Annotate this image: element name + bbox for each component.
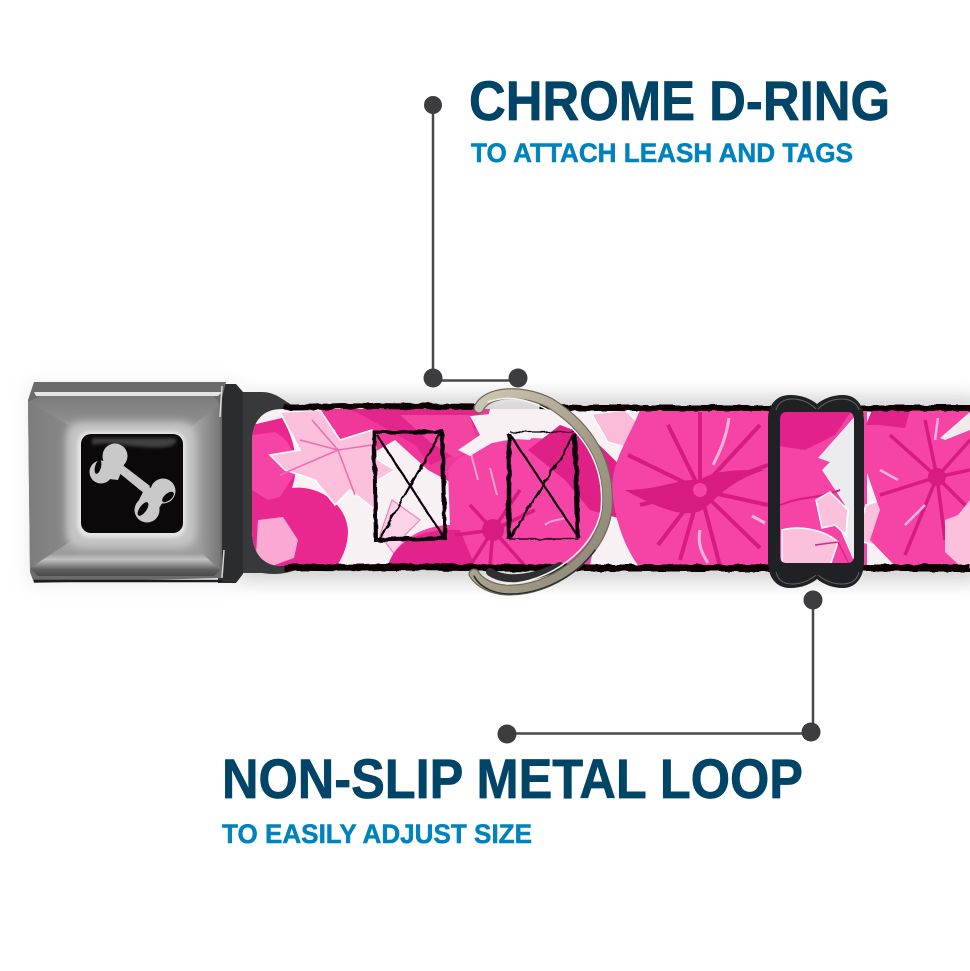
light flower left [270,410,395,512]
left flower pieces [252,418,348,570]
buckle bevel left [28,402,80,568]
callout leader: metal loop [498,590,822,744]
icon: bone [90,444,176,522]
light flower near ring [591,410,636,447]
white pieces at top centre [458,414,532,456]
buckle bevel top [28,396,220,432]
buckle bevel right [183,405,220,570]
right flower [866,410,970,566]
badge gloss [92,438,177,448]
buckle soft glow frame [66,422,196,548]
heading: non-slip metal loop: NON-SLIP METAL LOOP [222,747,803,810]
buckle bottom edge [34,580,222,582]
strap connector behind buckle [238,392,296,574]
centre flower [388,425,625,566]
white gap and light sketch flower [379,499,421,554]
buckle base [28,382,226,583]
black square badge [81,434,183,533]
chrome D-ring [474,394,607,594]
callout leader: D-ring [424,96,528,388]
webbing black edge bottom [284,567,970,568]
webbing black edge top [284,406,970,408]
upper pink flower [300,409,490,482]
stitched box left [374,432,445,540]
white area under ring [590,522,604,565]
subheading: to attach leash and tags: TO ATTACH LEASH AND TAGS [471,138,853,168]
buckle side hinge [218,384,243,583]
patterned pink webbing [250,405,970,570]
subheading: to easily adjust size: TO EASILY ADJUST SIZE [222,819,532,849]
strap drop shadow [28,384,970,584]
non-slip metal loop [768,395,864,588]
flower inside loop [780,411,880,565]
large flower centre [612,410,772,568]
stitched box right [509,432,578,539]
seatbelt buckle [28,382,243,583]
webbing floral pattern [250,405,970,570]
buckle bevel bottom [30,535,220,576]
hinge highlights [220,386,224,578]
buckle highlight frame [77,431,186,538]
buckle top highlight [34,392,222,396]
heading: chrome d-ring: CHROME D-RING [469,69,890,132]
